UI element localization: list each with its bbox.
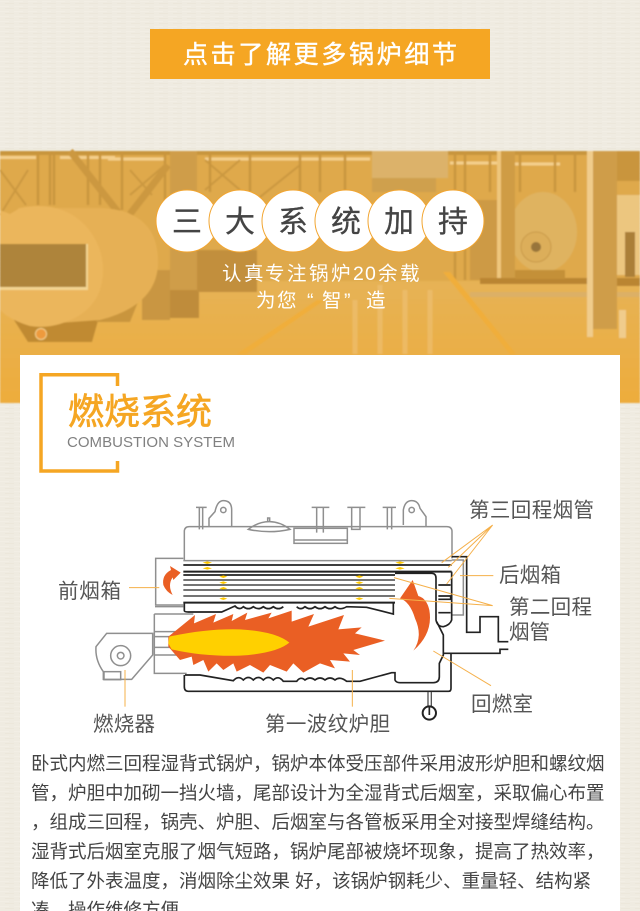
tube stay markers (203, 561, 405, 600)
diagram labels: 第二回程 (509, 596, 592, 619)
heading circles: three major systems: 加 (384, 206, 414, 239)
description text: 降低了外表温度，消烟除尘效果 好，该锅炉钢耗少、重量轻、结构紧 (31, 870, 591, 891)
section title: 燃烧系统 (68, 391, 212, 432)
description text: ，组成三回程，锅壳、炉胆、后烟室与各管板采用全对接型焊缝结构。 (31, 812, 605, 833)
banner subtitle (222, 263, 420, 312)
heading circles: three major systems (156, 190, 484, 252)
diagram labels: 燃烧器 (93, 713, 155, 736)
description text: 卧式内燃三回程湿背式锅炉，锅炉本体受压部件采用波形炉胆和螺纹烟 (31, 753, 605, 774)
diagram labels: 前烟箱 (58, 580, 121, 603)
description text: 管，炉胆中加砌一挡火墙，尾部设计为全湿背式后烟室，采取偏心布置 (31, 782, 605, 803)
banner: factory photo with orange tint (0, 151, 640, 403)
flame (168, 611, 385, 673)
heading circles: three major systems: 三 (172, 206, 202, 239)
section title (67, 391, 235, 451)
section heading bracket (41, 375, 118, 471)
diagram labels (58, 499, 594, 736)
banner subtitle: 认真专注锅炉20余载 (222, 263, 420, 285)
diagram labels: 后烟箱 (499, 564, 561, 587)
heading circles: three major systems: 系 (278, 206, 308, 239)
heading circles: three major systems: 大 (225, 206, 255, 239)
arrows: gas flow (163, 566, 430, 651)
boiler shell and fittings (96, 501, 463, 680)
heading circles: three major systems: 统 (331, 206, 361, 239)
banner subtitle: 为您“智”造 (256, 290, 386, 312)
diagram labels: 第一波纹炉胆 (265, 713, 390, 736)
panel: combustion system (20, 355, 620, 911)
gauge (423, 692, 436, 720)
heading circles: three major systems: 持 (438, 206, 468, 239)
section title: COMBUSTION SYSTEM (67, 434, 235, 451)
diagram labels: 烟管 (509, 621, 550, 644)
button: click for boiler details: 点击了解更多锅炉细节 (183, 41, 457, 69)
smoke tubes (183, 565, 452, 603)
leader lines (125, 525, 493, 707)
button: click for boiler details (150, 29, 490, 79)
diagram labels: 回燃室 (471, 693, 533, 716)
description text: 湿背式后烟室克服了烟气短路，锅炉尾部被烧坏现象，提高了热效率， (31, 841, 605, 862)
diagram labels: 第三回程烟管 (469, 499, 594, 522)
furnace outline (184, 557, 508, 691)
description text (31, 753, 605, 911)
boiler diagram (96, 501, 508, 720)
